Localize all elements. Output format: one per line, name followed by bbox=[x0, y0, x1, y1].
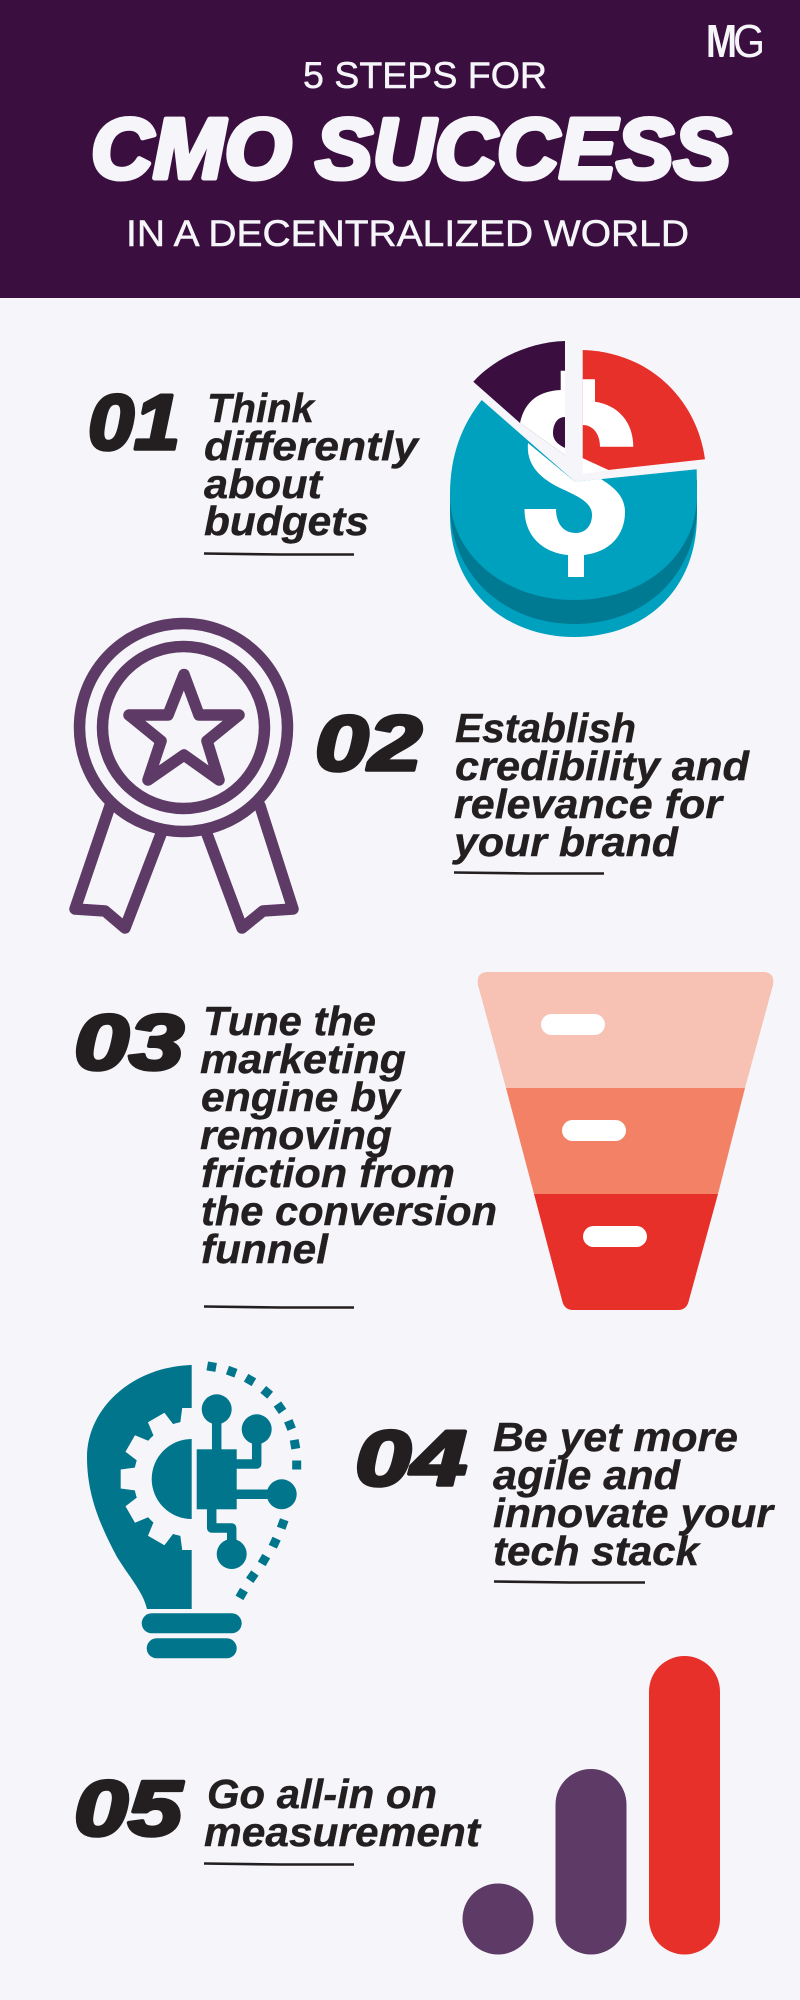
gear cutout bbox=[121, 1408, 250, 1550]
icon: conversion funnel bbox=[478, 972, 773, 1310]
step 01 text: about bbox=[204, 461, 324, 507]
step 04 text: innovate your bbox=[493, 1490, 775, 1536]
step 02 text: relevance for bbox=[454, 781, 724, 827]
title line: in a decentralized world: IN A DECENTRALIZED WORLD bbox=[126, 212, 689, 254]
step 03 text: engine by bbox=[201, 1074, 403, 1120]
step 02 number: 02 bbox=[315, 699, 422, 787]
step 01 text: differently bbox=[204, 423, 421, 469]
step 01 text bbox=[204, 385, 421, 554]
step 02 text bbox=[452, 705, 750, 874]
icon: bar chart bbox=[462, 1656, 720, 1954]
step 04 text: agile and bbox=[493, 1452, 681, 1498]
red wedge bbox=[583, 350, 705, 470]
step 02 text: Establish bbox=[455, 705, 636, 751]
step 03 text: Tune the bbox=[203, 998, 376, 1044]
header panel bbox=[0, 0, 800, 298]
step 03 number: 03 bbox=[74, 998, 184, 1086]
step 03 text: removing bbox=[200, 1112, 392, 1158]
icon: pie chart with dollar sign bbox=[450, 341, 705, 637]
step 04 text: tech stack bbox=[493, 1528, 702, 1574]
icon: award ribbon badge bbox=[75, 624, 293, 928]
step 05 text: measurement bbox=[204, 1809, 482, 1855]
icon: light bulb with gear and circuit bbox=[87, 1361, 301, 1658]
step 02 text: your brand bbox=[452, 819, 679, 865]
title: CMO success: CMO SUCCESS bbox=[91, 102, 731, 197]
step 01 number: 01 bbox=[88, 378, 180, 466]
step 05 text: Go all-in on bbox=[207, 1771, 437, 1817]
step 03 text: marketing bbox=[200, 1036, 406, 1082]
circuit chip bbox=[197, 1394, 297, 1569]
step 04 text: Be yet more bbox=[493, 1414, 738, 1460]
title line: 5 steps for: 5 STEPS FOR bbox=[303, 54, 547, 96]
purple wedge bbox=[473, 341, 565, 455]
step 03 text: the conversion bbox=[201, 1188, 497, 1234]
step 03 text: funnel bbox=[201, 1226, 329, 1272]
step 03 text: friction from bbox=[201, 1150, 455, 1196]
step 01 text: Think bbox=[207, 385, 316, 431]
dollar sign lower half bbox=[524, 443, 625, 577]
step 03 text bbox=[200, 998, 497, 1308]
step 05 number: 05 bbox=[74, 1764, 184, 1852]
step 05 text bbox=[204, 1771, 482, 1864]
logo: MG bbox=[706, 15, 765, 67]
logo: MG: M bbox=[706, 15, 737, 67]
step 04 number: 04 bbox=[355, 1414, 467, 1502]
dashed arc bbox=[206, 1361, 301, 1600]
step 02 text: credibility and bbox=[455, 743, 750, 789]
step 01 text: budgets bbox=[204, 498, 369, 544]
logo: MG: G bbox=[733, 15, 765, 67]
step 04 text bbox=[493, 1414, 775, 1582]
